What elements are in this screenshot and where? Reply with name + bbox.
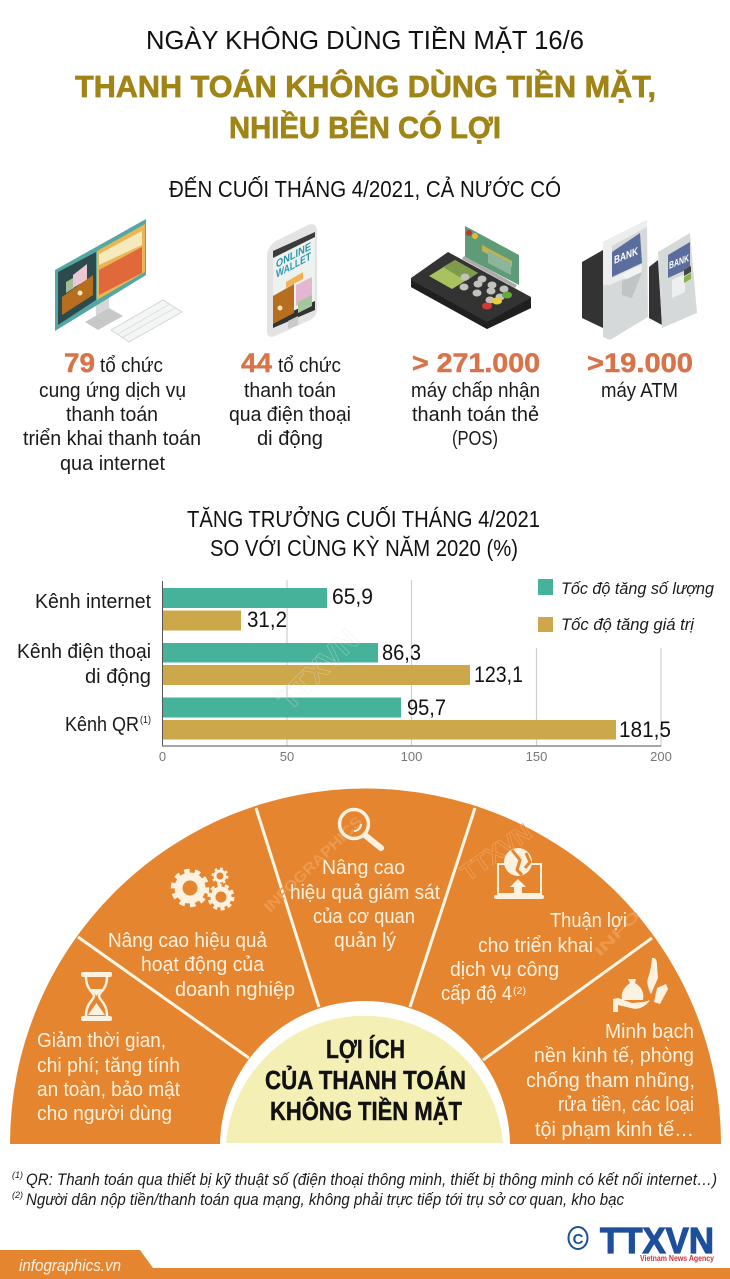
footnotes: Người dân nộp tiền/thanh toán qua mạng, không phải trực tiếp tới trụ sở cơ quan, kho bạc [26,1191,625,1209]
segment: transparency: rửa tiền, các loại [558,1094,694,1116]
heading: growth chart title: TĂNG TRƯỞNG CUỐI THÁNG 4/2021 [187,504,540,532]
stat: over 19,000 ATMs: máy ATM [601,380,678,402]
axis tick labels: 150 [526,749,547,764]
segment: business efficiency: doanh nghiệp [175,979,295,1001]
axis tick labels [159,749,672,764]
stat: over 19,000 ATMs: >19.000 [587,348,693,378]
center hub: benefits of cashless payment [220,1001,510,1146]
category labels: Kênh điện thoại [17,641,151,663]
watermarks: INFO [591,907,643,959]
logo: TTXVN Vietnam News Agency: Vietnam News Agency [640,1254,714,1263]
heading: main title line 2: NHIỀU BÊN CÓ LỢI [229,109,501,145]
icon: gears [173,869,232,908]
segment: public services: (2) [513,986,526,997]
segment: save time and cost: cho người dùng [37,1103,172,1125]
axis tick labels: 200 [650,749,672,764]
stat: 79 internet payment providers: tổ chức [100,355,163,377]
center hub: benefits of cashless payment: KHÔNG TIỀN MẶT [270,1096,462,1126]
footer band: infographics.vn [0,1250,730,1279]
segment: business efficiency [108,869,295,1001]
stat: over 19,000 ATMs [587,348,693,402]
stat: 79 internet payment providers: cung ứng dịch vụ [39,380,186,402]
stat: 44 mobile payment organisations: tổ chức [278,355,341,377]
stat: over 271,000 POS terminals: (POS) [452,428,498,450]
segment: save time and cost: Giảm thời gian, [37,1030,166,1052]
segment dividers [78,808,652,1060]
logo: TTXVN Vietnam News Agency: C [573,1231,584,1248]
value labels: 86,3 [382,640,421,665]
segment: public services: cấp độ 4 [441,983,512,1005]
category labels: di động [85,666,151,688]
heading: main title line 1: THANH TOÁN KHÔNG DÙNG TIỀN MẶT, [75,68,656,104]
footer band: infographics.vn: infographics.vn [19,1256,121,1275]
segment: transparency [526,958,695,1141]
segment: transparency: chống tham nhũng, [526,1070,695,1092]
segment: transparency: nền kinh tế, phòng [534,1045,694,1067]
heading: event name: NGÀY KHÔNG DÙNG TIỀN MẶT 16/6 [146,26,584,55]
legend [538,579,715,634]
heading: growth chart title: SO VỚI CÙNG KỲ NĂM 2020 (%) [210,535,518,561]
segment: better oversight: Nâng cao [322,857,405,879]
axis tick labels: 100 [401,749,422,764]
stat: 44 mobile payment organisations: di động [257,428,323,450]
heading: growth chart title [187,504,540,561]
footnotes: (2) [12,1190,23,1200]
watermarks: INFOGRAPHICS [261,813,366,916]
icon: smartphone with online wallet [267,224,317,337]
stat: 44 mobile payment organisations: qua điện thoại [229,404,351,426]
stat: over 271,000 POS terminals: thanh toán thẻ [412,404,539,426]
center hub: benefits of cashless payment: LỢI ÍCH [326,1034,405,1064]
heading: section subtitle: ĐẾN CUỐI THÁNG 4/2021, CẢ NƯỚC CÓ [169,174,561,202]
watermark: TTXVN [272,623,366,717]
footnotes: (1) [12,1170,23,1180]
segment: public services [441,848,627,1005]
stat: 44 mobile payment organisations: thanh toán [244,380,336,402]
axis tick labels: 0 [159,749,166,764]
bars: QR channel [163,698,616,740]
segment: business efficiency: Nâng cao hiệu quả [108,930,268,952]
value labels: 95,7 [407,695,446,720]
icon: smartphone with online wallet: ONLINE [276,240,311,271]
segment: better oversight: của cơ quan [313,906,415,928]
stat: over 271,000 POS terminals [411,348,540,450]
icon: ATM machines: BANK [669,253,689,272]
icon: desktop computer with wallet [55,219,182,342]
center hub: benefits of cashless payment: CỦA THANH TOÁN [265,1064,466,1095]
icon: smartphone with online wallet: WALLET [276,250,312,281]
icon: hand with money bag [613,958,668,1012]
segment: save time and cost [37,972,180,1125]
stat: 79 internet payment providers: qua internet [60,453,165,475]
stat: 44 mobile payment organisations [229,348,351,450]
icon: hourglass [81,972,112,1021]
stat: 79 internet payment providers: triển khai thanh toán [23,428,201,450]
value labels: 65,9 [332,584,373,609]
segment: transparency: tội phạm kinh tế… [535,1119,694,1141]
watermarks [261,813,643,959]
bars: mobile channel [163,643,470,685]
legend: Tốc độ tăng số lượng [561,579,715,598]
segment: public services: cho triển khai [478,935,593,957]
segment: save time and cost: chi phí; tăng tính [37,1055,180,1077]
segment: better oversight: hiệu quả giám sát [290,882,440,904]
category labels: Kênh internet [35,591,151,613]
stat: over 271,000 POS terminals: máy chấp nhận [411,380,540,402]
category labels [17,591,151,736]
bars: internet channel [163,588,327,630]
icon: laptop with globe [494,848,544,899]
stat: 79 internet payment providers: 79 [64,348,95,378]
segment: save time and cost: an toàn, bảo mật [37,1079,180,1101]
stat: over 271,000 POS terminals: > 271.000 [412,348,540,378]
segment: transparency: Minh bạch [605,1021,694,1043]
stat: 79 internet payment providers: thanh toán [66,404,158,426]
stat: 44 mobile payment organisations: 44 [241,348,272,378]
segment: public services: dịch vụ công [450,959,559,981]
legend: Tốc độ tăng giá trị [561,615,695,634]
category labels: Kênh QR [65,714,139,736]
icon: magnifying glass [340,810,381,848]
category labels: (1) [140,715,151,726]
value labels: 181,5 [619,717,671,742]
icon: POS card terminal [411,226,531,329]
segment: better oversight [290,810,440,952]
footnotes [12,1170,717,1209]
segment: business efficiency: hoạt động của [141,954,265,976]
panel: benefits semicircle [10,788,721,1146]
value labels: 123,1 [474,662,523,687]
segment: public services: Thuận lợi [550,910,627,932]
axis tick labels: 50 [280,749,294,764]
icon: ATM machines: BANK [614,245,639,267]
watermarks: TTXVN [456,819,537,887]
bar chart: growth by channel [17,579,715,764]
icon: ATM machines [582,220,697,340]
title: header block [75,26,656,202]
value labels [247,584,671,742]
stat: 79 internet payment providers [23,348,201,475]
value labels: 31,2 [247,607,287,632]
segment: better oversight: quản lý [334,930,396,952]
logo: TTXVN Vietnam News Agency: TTXVN [600,1220,714,1261]
